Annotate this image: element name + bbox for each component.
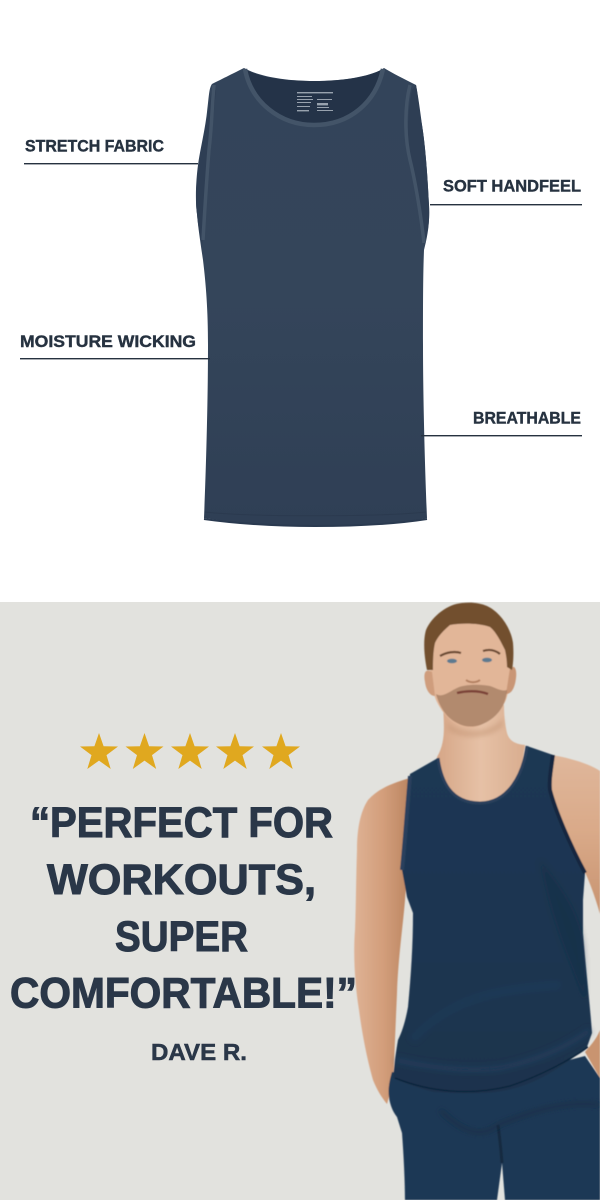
- left ear: [424, 670, 435, 696]
- review quote: WORKOUTS,: [47, 856, 316, 904]
- star rating: [80, 733, 300, 769]
- left arm: [354, 778, 412, 1104]
- beard: [436, 685, 507, 727]
- neck and chest: [437, 705, 525, 806]
- eyes: [447, 659, 457, 663]
- head: face: [430, 621, 510, 728]
- right ear: [506, 667, 516, 694]
- callout: moisture wicking: MOISTURE WICKING: [20, 333, 196, 351]
- tank armhole binding: [402, 776, 410, 870]
- hem stitch: [205, 512, 426, 516]
- panel: customer review: [0, 602, 600, 1200]
- right armhole binding: [406, 85, 424, 243]
- review quote: SUPER: [115, 913, 248, 961]
- worn tank top: [393, 746, 592, 1093]
- review quote: [10, 799, 357, 1018]
- callout: stretch fabric: STRETCH FABRIC: [25, 138, 164, 156]
- product photo: navy tank top: [196, 68, 429, 526]
- right arm and shoulder: [550, 755, 600, 914]
- right side back panel: [408, 85, 429, 245]
- review quote: “PERFECT FOR: [30, 799, 333, 847]
- tank interior neck: [247, 70, 381, 124]
- mouth: [457, 691, 488, 694]
- tank neck binding: [438, 746, 527, 803]
- review quote: COMFORTABLE!”: [10, 970, 357, 1018]
- chin shadow: [447, 718, 503, 737]
- callout: soft handfeel: SOFT HANDFEEL: [443, 178, 581, 196]
- panel: product features: [0, 0, 600, 602]
- left armhole binding: [203, 85, 214, 240]
- review author: DAVE R.: [151, 1039, 247, 1065]
- nose shadow: [466, 680, 480, 682]
- left side back panel: [196, 90, 216, 246]
- neck binding: [245, 69, 383, 125]
- neck label print: [297, 92, 333, 111]
- eyebrows: [440, 652, 461, 656]
- right hand: [585, 1030, 600, 1078]
- shorts: [389, 1056, 600, 1200]
- callout: breathable: BREATHABLE: [473, 410, 581, 428]
- tank folds: [396, 1030, 590, 1070]
- hair: [424, 603, 513, 670]
- photo: man wearing tank top: [354, 603, 600, 1200]
